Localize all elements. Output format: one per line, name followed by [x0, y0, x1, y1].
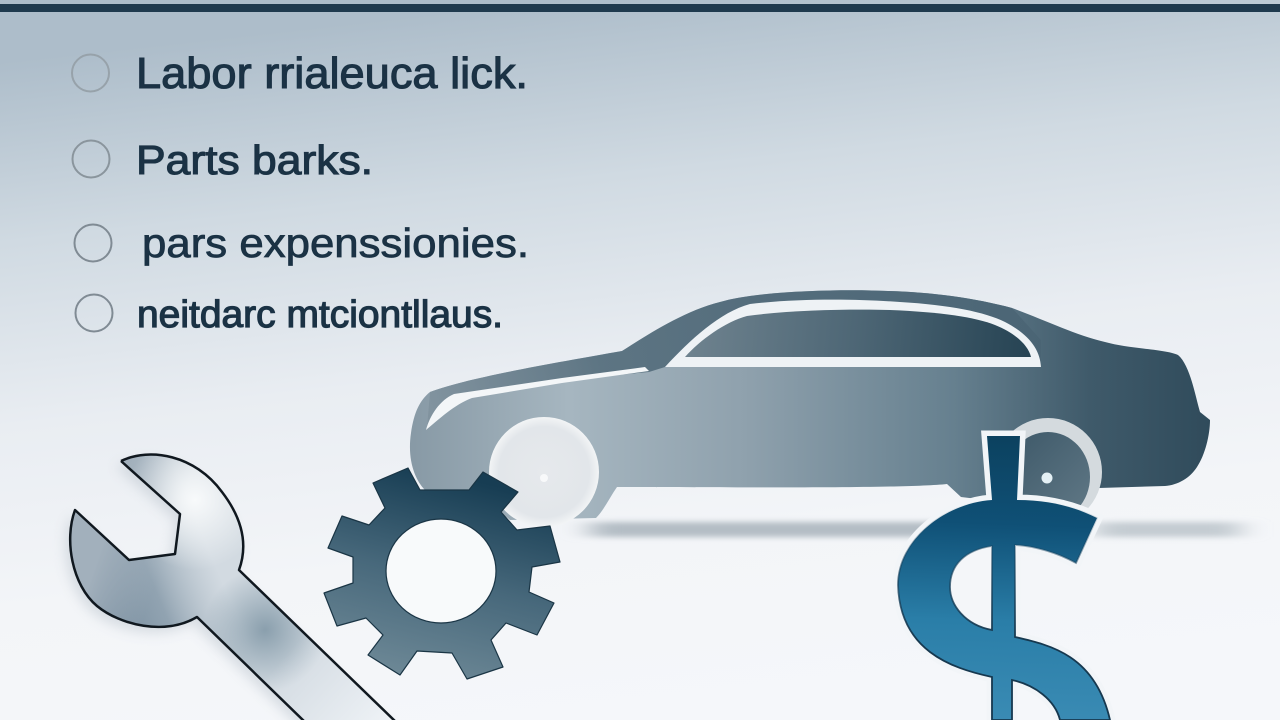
hood highlight	[426, 367, 649, 430]
list item: parts: Parts barks.	[136, 137, 373, 183]
dollar glyph	[898, 436, 1110, 720]
wrench fill	[71, 456, 380, 720]
wrench outline	[70, 455, 398, 720]
dollar counter background	[950, 546, 992, 630]
front wheel	[489, 417, 599, 527]
car body	[410, 290, 1210, 520]
list item: labor: Labor rrialeuca lick.	[136, 49, 528, 98]
window glass	[685, 310, 1031, 357]
floor shadow	[590, 522, 1240, 537]
cost list	[72, 49, 529, 336]
rear wheel	[994, 418, 1102, 526]
car roof shading	[427, 290, 1041, 428]
gear hole	[387, 520, 495, 622]
gear	[324, 468, 560, 679]
list item: miscellaneous: neitdarc mtciontllaus.	[137, 294, 503, 336]
wrench shadow	[65, 461, 393, 720]
wrench	[60, 445, 405, 720]
car	[410, 290, 1210, 527]
list item: expenses: pars expenssionies.	[142, 220, 529, 266]
window frame	[665, 300, 1041, 367]
dollar halo	[898, 436, 1110, 720]
top rule	[0, 4, 1280, 12]
dollar sign	[898, 436, 1110, 720]
